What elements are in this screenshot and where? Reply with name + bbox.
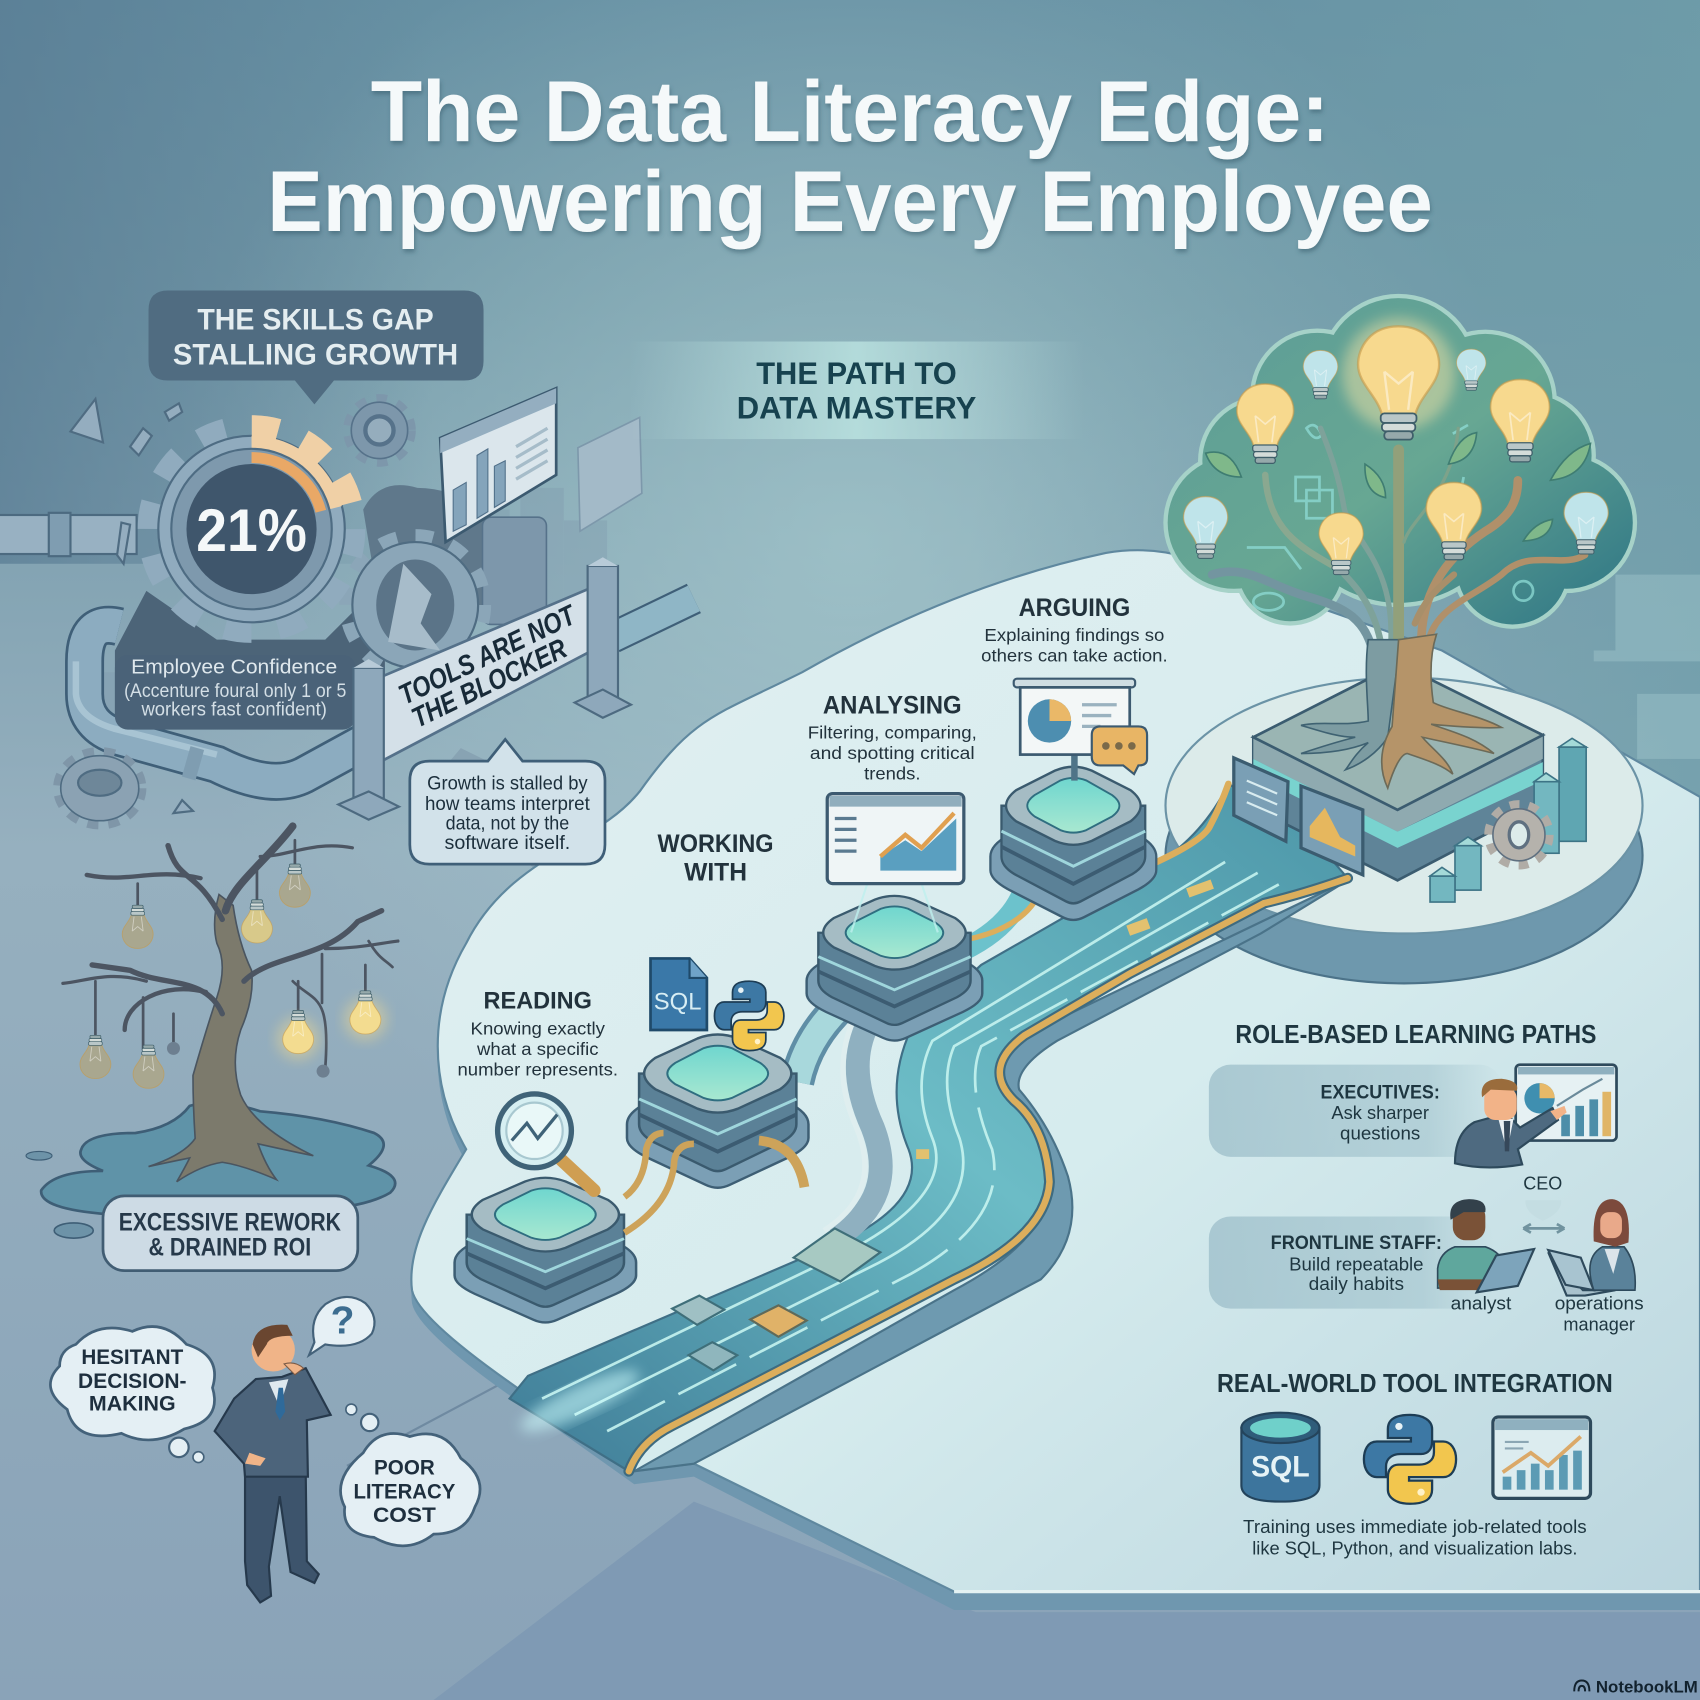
puddle (41, 1103, 395, 1214)
icon: executive dashboard (1516, 1065, 1617, 1141)
step label: analysing: and spotting critical (810, 743, 975, 763)
panel: employee confidence (115, 655, 356, 730)
broken left pipe (0, 513, 137, 556)
panel: employee confidence: workers fast confident) (141, 700, 327, 721)
left illustration: broken machinery (0, 399, 694, 824)
screens at base (1234, 758, 1363, 875)
machine column (482, 517, 546, 624)
panel: frontline staff: FRONTLINE STAFF: (1271, 1233, 1442, 1254)
drained droplets (167, 1042, 330, 1078)
gear small top (348, 399, 411, 462)
question bubble: ? (331, 1300, 355, 1343)
icon: python logo (1364, 1415, 1456, 1504)
pale bulbs (1183, 349, 1608, 558)
heading: skills gap callout (149, 291, 484, 404)
second faded window (578, 417, 642, 531)
tree crown (1163, 294, 1637, 629)
elbow pipe (76, 625, 363, 781)
labels: analyst and operations manager (1451, 1293, 1644, 1334)
broken dark backdrop (115, 591, 385, 716)
step 4: arguing node (990, 679, 1156, 920)
dead trunk (149, 894, 313, 1182)
icon: SQL cylinder: SQL (1251, 1452, 1310, 1484)
icon: connector arrow (1523, 1200, 1564, 1233)
icon: executive figure (1455, 1079, 1567, 1167)
step label: arguing: Explaining findings so (984, 625, 1164, 645)
person thinking (215, 1325, 331, 1602)
heading: ROLE-BASED LEARNING PATHS (1235, 1021, 1596, 1049)
thought cloud: hesitant decision-making: DECISION- (78, 1368, 186, 1393)
knowledge tree (1163, 294, 1637, 788)
description: like SQL, Python, and visualization labs. (1252, 1538, 1577, 1559)
icon: magnifier (498, 1094, 594, 1190)
icon: chart window (1493, 1417, 1590, 1498)
circuit marks (1247, 425, 1533, 610)
main platform (411, 550, 1700, 1610)
labels: analyst and operations manager: operations (1555, 1293, 1644, 1314)
sign: tools are not the blocker: TOOLS ARE NOT (393, 597, 582, 711)
leaves (1206, 433, 1590, 541)
step label: arguing (981, 594, 1168, 665)
step label: arguing: ARGUING (1019, 594, 1130, 622)
callout: growth is stalled: software itself. (445, 833, 570, 854)
panel: executives: Ask sharper (1331, 1102, 1429, 1123)
road tokens (794, 1228, 880, 1282)
step label: analysing: trends. (864, 764, 920, 784)
icon: SQL document (651, 958, 707, 1030)
gear broken (347, 537, 484, 673)
thought cloud: hesitant decision-making (50, 1327, 215, 1463)
icon: analyst figure (1438, 1199, 1534, 1292)
notebooklm mark: NotebookLM (1596, 1678, 1698, 1696)
gauge value: 21% (196, 496, 307, 564)
step label: working with: WITH (684, 858, 747, 886)
debris (70, 399, 193, 813)
step 1: reading node (455, 1094, 636, 1322)
lit bulbs (276, 991, 387, 1060)
panel: frontline staff (1209, 1216, 1493, 1309)
data road (510, 784, 1348, 1471)
callout: growth is stalled: Growth is stalled by (427, 773, 588, 794)
heading: path to data mastery: THE PATH TO (756, 356, 957, 391)
icon: SQL document: SQL (654, 988, 701, 1015)
panel: employee confidence: Employee Confidence (131, 655, 337, 678)
sign: tools are not the blocker: THE BLOCKER (406, 632, 572, 734)
step label: reading: number represents. (458, 1060, 618, 1080)
icon: presentation board (1014, 679, 1135, 781)
branches (1212, 428, 1585, 661)
step label: reading: Knowing exactly (471, 1018, 605, 1038)
faded road behind sign (434, 748, 705, 932)
right pipe (613, 598, 694, 638)
icon: SQL cylinder (1241, 1413, 1319, 1502)
step label: working with (658, 830, 774, 886)
title: Empowering Every Employee (267, 153, 1433, 250)
heading: skills gap callout: THE SKILLS GAP (197, 305, 434, 337)
icon: base gear (1489, 804, 1549, 865)
heading: path to data mastery (629, 342, 1084, 439)
icon: chat bubble (1092, 726, 1147, 774)
label: excessive rework: EXCESSIVE REWORK (119, 1209, 341, 1237)
description (1243, 1516, 1587, 1559)
title: The Data Literacy Edge: (371, 63, 1329, 160)
step label: analysing: Filtering, comparing, (808, 722, 977, 742)
gold connectors (624, 1133, 804, 1233)
pipes between nodes (797, 846, 1046, 1082)
icon: operations manager figure (1548, 1199, 1635, 1296)
gear bottom (59, 752, 141, 824)
panel: executives: questions (1340, 1122, 1420, 1143)
step label: arguing: others can take action. (981, 645, 1168, 665)
dead tree scene (26, 826, 398, 1238)
panel: frontline staff: daily habits (1309, 1273, 1404, 1294)
thought cloud: poor literacy cost: POOR (374, 1454, 435, 1479)
trunk (1301, 640, 1401, 770)
circular base platform (1165, 678, 1643, 983)
panel: executives: EXECUTIVES: (1321, 1082, 1440, 1103)
label: CEO: CEO (1523, 1172, 1562, 1193)
section: real-world tool integration (1217, 1368, 1613, 1559)
smoke (363, 485, 499, 618)
step label: analysing (808, 691, 977, 784)
title (267, 63, 1433, 250)
thought cloud: poor literacy cost: COST (373, 1502, 436, 1527)
callout: growth is stalled (410, 739, 605, 864)
step 2: working with node (627, 958, 808, 1188)
glowing bulbs (1237, 318, 1550, 575)
step label: reading: what a specific (476, 1039, 599, 1059)
panel: frontline staff: Build repeatable (1289, 1254, 1424, 1275)
label: excessive rework: & DRAINED ROI (149, 1233, 311, 1261)
thought cloud: poor literacy cost (341, 1404, 480, 1546)
labels: analyst and operations manager: analyst (1451, 1293, 1511, 1314)
section: role-based learning paths (1209, 1021, 1644, 1334)
main gear 21% (151, 428, 352, 630)
thought cloud: hesitant decision-making: HESITANT (81, 1344, 183, 1369)
thought cloud: poor literacy cost: LITERACY (353, 1478, 456, 1503)
panel: executives (1209, 1065, 1502, 1157)
description: Training uses immediate job-related tools (1243, 1516, 1587, 1537)
step label: analysing: ANALYSING (823, 691, 962, 719)
callout: growth is stalled: data, not by the (446, 813, 569, 834)
labels: analyst and operations manager: manager (1563, 1313, 1635, 1334)
step label: reading (458, 987, 618, 1080)
label: excessive rework (103, 1196, 358, 1271)
step 3: analysing node (807, 794, 982, 1041)
icon: python logo (714, 981, 784, 1051)
dead branches (63, 826, 398, 1068)
drained bulbs (80, 864, 310, 1088)
road light streams (542, 862, 1290, 1431)
panel: employee confidence: (Accenture foural only 1 or 5 (124, 681, 346, 702)
sign: tools are not the blocker (338, 557, 631, 820)
icon: dashboard (827, 794, 964, 932)
city silhouette (87, 488, 607, 737)
heading: REAL-WORLD TOOL INTEGRATION (1217, 1368, 1613, 1398)
question bubble (309, 1297, 375, 1355)
tree base block (1234, 664, 1586, 902)
isometric bars (1430, 738, 1586, 902)
step label: working with: WORKING (658, 830, 774, 858)
dashboard window (440, 388, 556, 542)
heading: path to data mastery: DATA MASTERY (737, 390, 976, 425)
faint skyline right (1594, 575, 1700, 759)
step label: reading: READING (484, 987, 592, 1014)
thought cloud: hesitant decision-making: MAKING (89, 1391, 176, 1416)
heading: skills gap callout: STALLING GROWTH (173, 339, 458, 371)
callout: growth is stalled: how teams interpret (425, 794, 591, 815)
